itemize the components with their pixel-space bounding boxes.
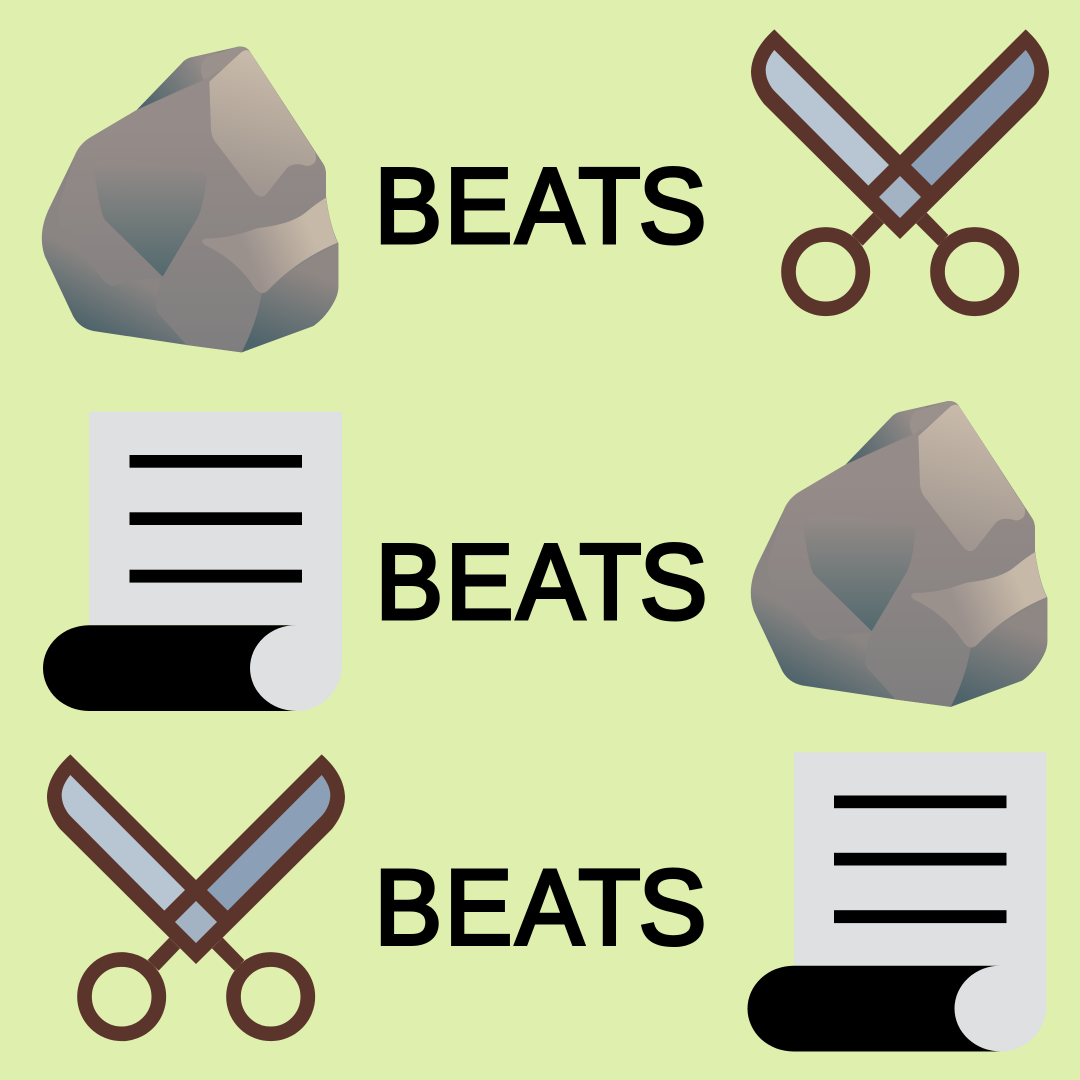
icon: rock top left bbox=[42, 47, 338, 352]
heading: BEATS row 1: BEATS bbox=[374, 147, 706, 266]
heading: BEATS row 2: BEATS bbox=[375, 523, 707, 642]
icon: rock middle right bbox=[751, 401, 1047, 707]
icon: paper scroll bottom right bbox=[748, 752, 1046, 1052]
icon: scissors top right bbox=[751, 29, 1049, 309]
icon: scissors bottom left bbox=[47, 754, 345, 1034]
heading: BEATS row 3: BEATS bbox=[374, 849, 706, 968]
icon: paper scroll middle left bbox=[43, 412, 342, 711]
